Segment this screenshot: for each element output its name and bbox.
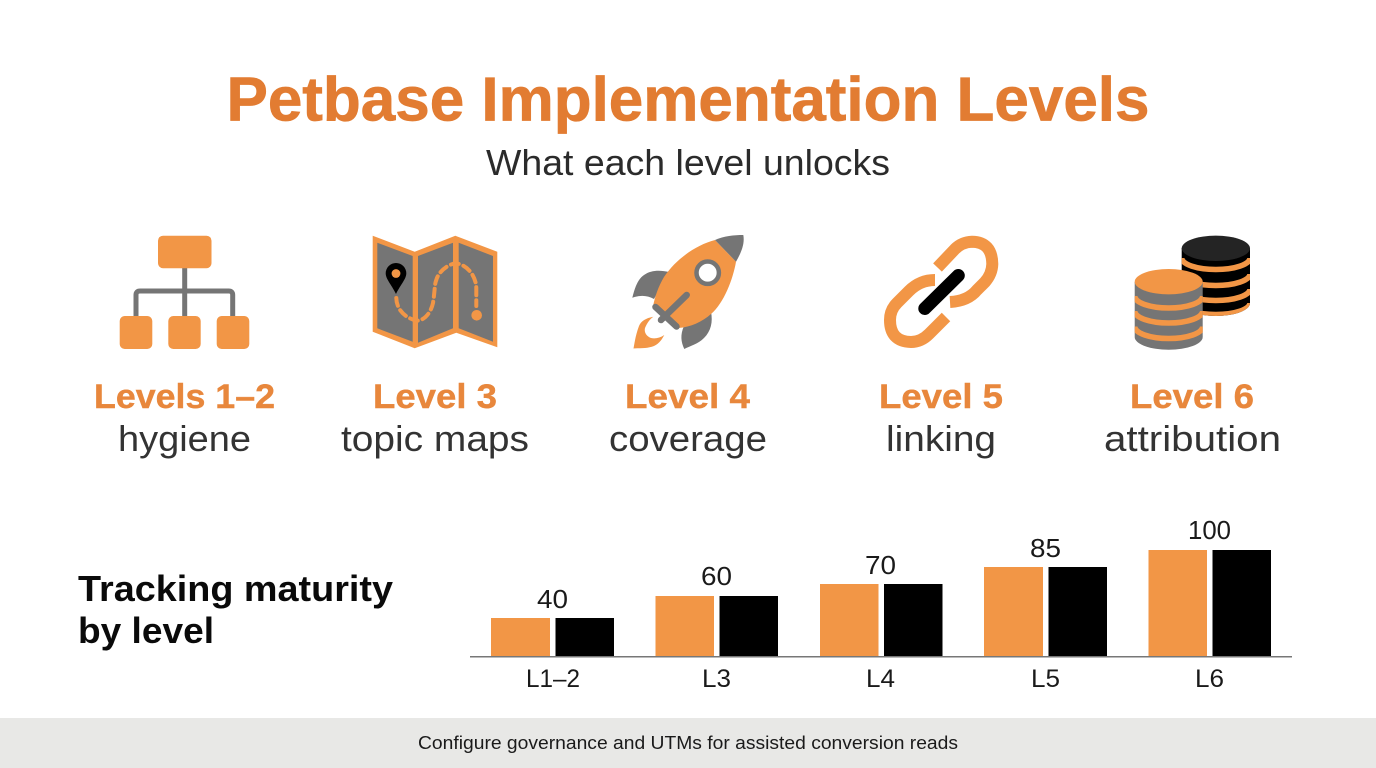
footer note: Configure governance and UTMs for assisted conversion reads [418,733,958,753]
heading: tracking maturity by level: by level [78,610,214,651]
panel: levels 1–2 hygiene [94,236,275,459]
panel: level 6 attribution [1104,236,1281,459]
bars: L6 = 100 [1148,550,1271,656]
value labels: 60 [701,561,732,591]
value labels [537,515,1231,614]
description: linking: linking [886,418,996,459]
description: attribution: attribution [1104,418,1281,459]
bars: L3 = 60 [656,596,778,656]
axis labels: L4 [866,665,895,693]
footer bar [0,718,1376,768]
subtitle: What each level unlocks [486,142,890,183]
value labels: 100 [1188,515,1231,545]
description: topic maps: topic maps [341,418,529,459]
label: level 6: Level 6 [1130,378,1254,416]
icon: hierarchy [120,236,249,349]
bars: L1–2 = 40 [491,618,614,656]
value labels: 85 [1030,533,1061,563]
axis labels: L1–2 [526,665,580,693]
panel: level 4 coverage [609,235,767,459]
value labels: 70 [865,550,896,580]
value labels: 40 [537,584,568,614]
axis labels: L5 [1031,665,1060,693]
icon: database stacks [1134,236,1251,350]
description: coverage: coverage [609,418,767,459]
icon: chain link [890,242,992,342]
axis labels: L6 [1195,665,1224,693]
axis labels: L3 [702,665,731,693]
bars: L4 = 70 [820,584,942,656]
heading: tracking maturity by level: Tracking maturity [78,568,393,609]
description: hygiene: hygiene [118,418,251,459]
panel: level 5 linking [879,242,1003,459]
icon: folded map with route [373,236,497,348]
label: level 3: Level 3 [373,378,497,416]
bar chart: tracking maturity [470,515,1292,693]
title: Petbase Implementation Levels [226,66,1150,134]
panel: level 3 topic maps [341,236,529,459]
label: level 5: Level 5 [879,378,1003,416]
label: levels 1–2: Levels 1–2 [94,378,275,416]
label: level 4: Level 4 [625,378,750,416]
axis labels [526,665,1224,693]
bars: L5 = 85 [984,567,1107,656]
icon: rocket [632,235,744,349]
